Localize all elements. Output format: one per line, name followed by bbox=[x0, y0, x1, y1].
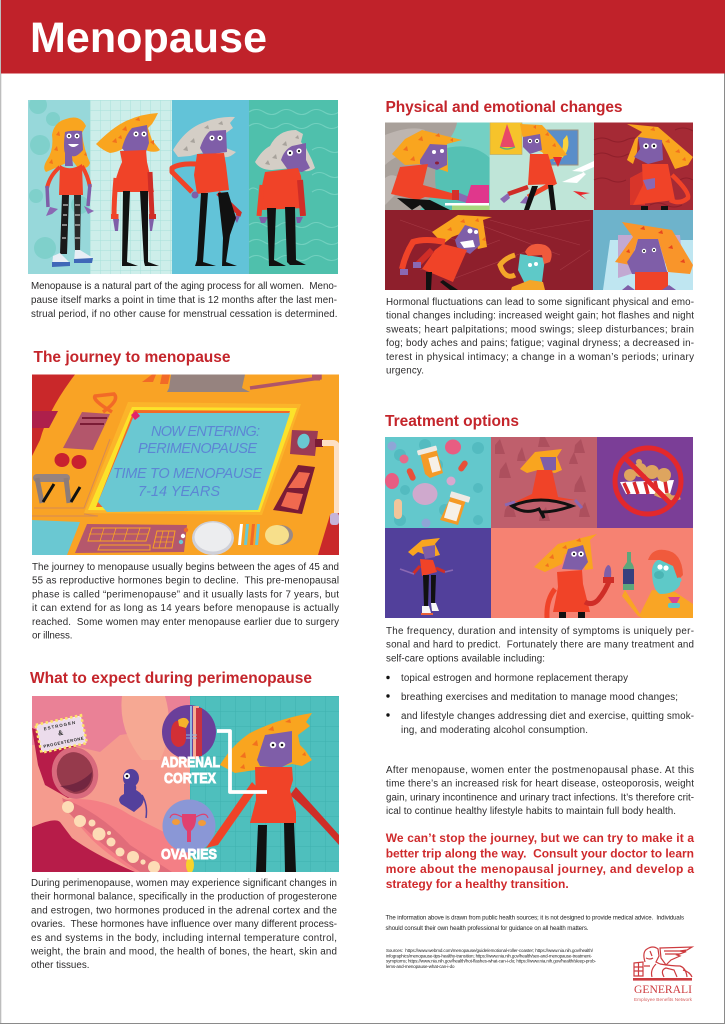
title: Menopause bbox=[30, 14, 267, 62]
heading: the journey: The journey to menopause bbox=[34, 349, 231, 366]
panel: sleep disturbance bbox=[593, 210, 693, 290]
heading: physical and emotional changes: Physical and emotional changes bbox=[386, 99, 622, 116]
call to action bbox=[386, 831, 694, 891]
list: treatments: topical estrogen and hormone replacement therapy bbox=[401, 673, 628, 684]
sources: Sources: https://www.webmd.com/menopause/guide/emotional-roller-coaster; https://www.nia.nih.gov/health/ bbox=[386, 948, 594, 953]
paragraph: postmenopausal phase: After menopause, women enter the postmenopausal phase. At this bbox=[386, 765, 694, 776]
logo: Generali bbox=[633, 947, 693, 1002]
right controls bbox=[290, 430, 318, 456]
heading: what to expect: What to expect during perimenopause bbox=[30, 670, 312, 687]
sources bbox=[386, 948, 596, 969]
paragraph: the journey bbox=[32, 562, 339, 642]
paragraph: frequency of symptoms: self-care options available including: bbox=[386, 653, 545, 664]
panel: weight gain at laptop bbox=[385, 122, 490, 210]
paragraph: hormonal fluctuations: Hormonal fluctuations can lead to some significant physical and emo- bbox=[386, 297, 694, 308]
call to action: strategy for a healthy transition. bbox=[386, 877, 569, 891]
character: young woman bbox=[44, 118, 94, 267]
character with pointer line bbox=[206, 713, 339, 872]
sign: estrogen & progesterone bbox=[36, 716, 87, 752]
list: treatments bbox=[386, 673, 694, 736]
top vent bbox=[167, 374, 250, 392]
title banner bbox=[1, 0, 725, 74]
paragraph: the journey: it can extend for as long as 14 years before menopause is actually bbox=[32, 603, 339, 614]
icon: winged lion bbox=[634, 947, 692, 977]
screen message: 7-14 YEARS bbox=[138, 484, 220, 500]
paragraph: during perimenopause: During perimenopause, women may experience significant changes in bbox=[31, 878, 337, 889]
bulb bbox=[278, 525, 293, 545]
disclaimer bbox=[386, 914, 684, 932]
paragraph: during perimenopause: weight, the brain and mood, the health of bones, the heart, skin and bbox=[30, 946, 337, 958]
paragraph: the journey: 55 as reproductive hormones begin to decline. This pre-menopausal bbox=[32, 576, 339, 587]
call to action: better trip along the way. Consult your doctor to learn bbox=[386, 846, 694, 860]
paragraph: the journey: The journey to menopause usually begins between the ages of 45 and bbox=[32, 562, 339, 573]
paragraph: hormonal fluctuations: tional changes including: increased weight gain; hot flashes and night bbox=[386, 311, 694, 322]
panel: mood swings bbox=[385, 210, 593, 290]
paragraph: what menopause is: strual period, if no other cause for menstrual cessation is determined. bbox=[31, 309, 338, 320]
paragraph: hormonal fluctuations: terest in physical intimacy; a change in a woman’s periods; urinary bbox=[386, 352, 694, 363]
icon: adrenal glands circle bbox=[162, 705, 216, 759]
panel: hot flashes bbox=[490, 122, 594, 210]
panel: moderating alcohol bbox=[491, 528, 693, 618]
label: adrenal cortex: ADRENAL bbox=[161, 754, 220, 771]
paragraph: postmenopausal phase: gain, urinary incontinence and urinary tract infections. It’s therefore crit- bbox=[386, 792, 694, 803]
paragraph: during perimenopause bbox=[30, 878, 338, 971]
illustration: inside the body and adrenal/ovaries bbox=[32, 696, 339, 873]
dial bbox=[192, 521, 234, 555]
illustration: four stages of the woman bbox=[28, 96, 342, 274]
connector line bbox=[217, 731, 267, 792]
sources: infographics/menopause-tips-healthy-transition; https://www.nia.nih.gov/health/sex-and-menopause-treatment- bbox=[386, 953, 592, 958]
illustration: spaceship control panel bbox=[32, 374, 339, 556]
paragraph: what menopause is: Menopause is a natural part of the aging process for all women. Meno- bbox=[31, 281, 337, 292]
panel: no junk food bbox=[597, 437, 693, 528]
sources: symptoms; https://www.nia.nih.gov/health/hot-flashes-what-can-i-do; https://www.nia.nih.gov/health/sleep-prob- bbox=[386, 959, 596, 964]
monitor glow bbox=[84, 402, 301, 515]
label: ovaries: OVARIES bbox=[161, 846, 217, 863]
paragraph: during perimenopause: their hormonal balance, specifically in the production of progesterone bbox=[31, 892, 338, 903]
screen message: TIME TO MENOPAUSE bbox=[113, 466, 262, 482]
call to action: more about the menopausal journey, and develop a bbox=[386, 862, 694, 876]
left controls bbox=[95, 394, 116, 412]
character: woman with grey hair, hand on hip bbox=[172, 117, 240, 266]
label: adrenal cortex bbox=[160, 756, 220, 784]
disclaimer: The information above is drawn from public health sources; it is not designed to provide medical advice. Individuals bbox=[386, 914, 684, 922]
sign: estrogen & progesterone: PROGESTERONE bbox=[43, 735, 84, 749]
paragraph: what menopause is bbox=[31, 281, 338, 320]
paragraph: postmenopausal phase bbox=[386, 765, 694, 817]
screen message: PERIMENOPAUSE bbox=[138, 441, 257, 457]
character: older woman with grey hair bbox=[255, 130, 315, 266]
tagline: Employee Benefits Network bbox=[634, 997, 693, 1002]
wordmark: GENERALI bbox=[634, 982, 692, 996]
character: perimenopause woman bbox=[96, 113, 160, 266]
icon: ovaries circle bbox=[162, 800, 216, 852]
paragraph: the journey: phase is called “perimenopause” and it usually lasts for 7 years, but bbox=[32, 589, 339, 600]
sign: estrogen & progesterone: & bbox=[57, 730, 64, 738]
paragraph: the journey: or illness. bbox=[32, 630, 72, 642]
purple creature bbox=[119, 769, 146, 818]
paragraph: during perimenopause: es and systems in the body, including internal temperature control, bbox=[31, 933, 337, 944]
paragraph: what menopause is: pause itself marks a point in time that is 12 months after the last men- bbox=[31, 295, 337, 306]
list: treatments: and lifestyle changes addressing diet and exercise, quitting smok- bbox=[401, 711, 694, 722]
paragraph: postmenopausal phase: ical to continue healthy lifestyle habits to maintain full body health. bbox=[386, 806, 676, 817]
illustration: treatment vignettes bbox=[385, 437, 693, 618]
monitor screen bbox=[98, 413, 290, 512]
paragraph: frequency of symptoms: sonal and hard to predict. Fortunately there are many treatment and bbox=[386, 640, 694, 651]
list: treatments: breathing exercises and meditation to manage mood changes; bbox=[401, 692, 678, 703]
paragraph: hormonal fluctuations: urgency. bbox=[386, 366, 424, 376]
disclaimer: should consult their own health professional for guidance on all health matters. bbox=[386, 925, 589, 932]
sign: estrogen & progesterone: ESTROGEN bbox=[43, 720, 76, 731]
paragraph: during perimenopause: ovaries. These hormones have influence over many different process- bbox=[31, 919, 337, 930]
keyboard bbox=[75, 524, 187, 553]
paragraph: the journey: reached. Some women may enter menopause earlier due to surgery bbox=[32, 617, 339, 628]
paragraph: hormonal fluctuations: fog; body aches and pains; fatigue; vaginal dryness; a decreased in- bbox=[386, 338, 694, 349]
screen message: NOW ENTERING: bbox=[151, 424, 260, 440]
illustration: symptom vignettes bbox=[385, 122, 707, 290]
heading: treatment options: Treatment options bbox=[385, 413, 519, 430]
panel: medication bbox=[385, 437, 491, 528]
panel: heart palpitations bbox=[594, 122, 693, 210]
paragraph: frequency of symptoms bbox=[386, 626, 694, 664]
panel: exercise bbox=[385, 528, 491, 618]
teal half bbox=[190, 696, 339, 872]
screen message bbox=[113, 424, 262, 500]
panel: meditation bbox=[491, 437, 597, 528]
list: treatments: ing, and moderating alcohol consumption. bbox=[401, 725, 588, 736]
paragraph: hormonal fluctuations bbox=[386, 297, 694, 376]
paragraph: during perimenopause: other tissues. bbox=[31, 960, 90, 971]
call to action: We can’t stop the journey, but we can try to make it a bbox=[386, 831, 694, 845]
paragraph: frequency of symptoms: The frequency, duration and intensity of symptoms is uniquely per- bbox=[386, 626, 694, 637]
paragraph: hormonal fluctuations: sweats; heart palpitations; mood swings; sleep disturbances; brain bbox=[386, 324, 694, 335]
paragraph: during perimenopause: and estrogen, two hormones produced in the adrenal cortex and the bbox=[31, 905, 338, 916]
label: adrenal cortex: CORTEX bbox=[164, 770, 216, 787]
paragraph: postmenopausal phase: time there’s an increased risk for heart disease, osteoporosis, weight bbox=[386, 779, 694, 790]
sources: lems-and-menopause-what-can-i-do bbox=[386, 964, 455, 969]
